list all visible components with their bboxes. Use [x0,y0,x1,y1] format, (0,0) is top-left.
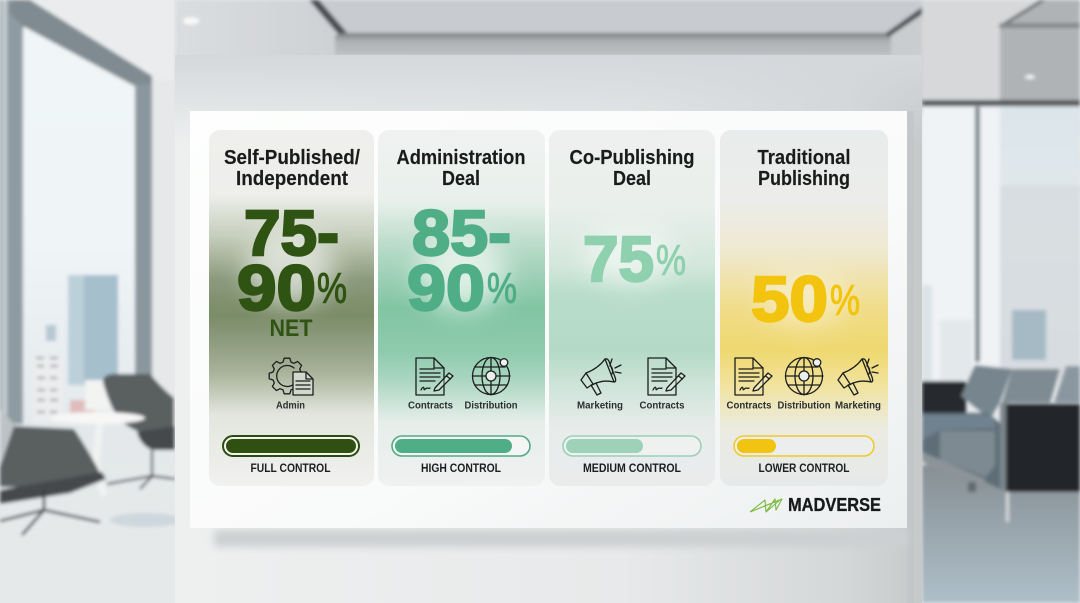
royalty figure: 75%: 75 [583,223,654,295]
royalty figure: 75-90% net: % [317,265,347,313]
panel: traditional publishing [720,130,888,486]
heading: traditional publishing [758,147,850,190]
control bar: medium [563,436,701,456]
left chair [0,410,20,474]
heading: traditional publishing: Traditional [758,147,850,169]
sofa seats [922,413,1002,490]
label: contracts: Contracts [408,400,453,412]
icon: globe [786,358,823,395]
heading: self-published: Self-Published/ [224,147,360,169]
heading: self-published: Independent [236,168,348,190]
icon: megaphone [838,359,878,395]
royalty figure: 75-90% net: 75- [244,197,339,269]
heading: self-published [224,147,360,190]
panel: administration deal [378,130,545,486]
royalty figure: 75% [583,223,686,295]
label: marketing: Marketing [835,400,881,412]
royalty figure: 75-90% net: NET [270,315,313,342]
sofa back [922,381,966,417]
royalty figure: 85-90% [407,197,517,324]
royalty figure: 50%: % [830,277,860,325]
control bar: high [392,436,530,456]
label: distribution: Distribution [464,400,518,412]
city buildings [68,275,118,385]
main infographic panel [190,111,907,528]
icon: contract [648,358,685,395]
royalty figure: 85-90%: 90 [407,252,485,324]
icon: globe [472,358,510,395]
main wall [175,55,922,603]
royalty figure: 75%: % [656,237,686,285]
right chair [103,374,174,432]
round table [96,420,104,496]
heading: administration deal [396,147,526,190]
label: contracts: Contracts [640,400,685,412]
left window [0,0,24,430]
heading: co-publishing deal [570,147,694,190]
label: high control: HIGH CONTROL [421,461,501,475]
sofa arm [1000,403,1007,490]
right floor [922,465,1080,603]
heading: administration deal: Deal [442,168,480,190]
control bar: full [223,436,359,456]
royalty figure: 50%: 50 [751,263,828,335]
label: contracts: Contracts [726,400,772,412]
label: medium control: MEDIUM CONTROL [583,461,681,475]
royalty figure: 85-90%: % [487,265,517,313]
royalty figure: 75-90% net [237,197,347,342]
label: lower control: LOWER CONTROL [758,461,850,475]
label: admin: Admin [276,400,305,412]
royalty figure: 85-90%: 85- [412,197,511,269]
heading: traditional publishing: Publishing [758,168,850,190]
heading: co-publishing deal: Co-Publishing [570,147,694,169]
panel: co-publishing deal [549,130,715,486]
logo: madverse [750,495,881,515]
heading: co-publishing deal: Deal [613,168,651,190]
royalty figure: 75-90% net: 90 [237,252,316,324]
icon: megaphone [581,359,621,395]
label: marketing: Marketing [577,400,623,412]
label: distribution: Distribution [778,400,830,412]
ceiling [0,0,1080,115]
control bar: lower [734,436,874,456]
label: full control: FULL CONTROL [250,461,330,475]
panel: self-published [209,130,374,486]
logo wordmark: MADVERSE [788,495,881,515]
royalty figure: 50% [751,263,860,335]
icon: contract [416,358,453,395]
icon: admin gear and document [269,358,313,395]
right window [922,107,1080,382]
top right glass [922,0,1080,102]
left floor [0,424,176,603]
sofa cushions [961,365,1012,419]
icon: contract [735,358,772,395]
heading: administration deal: Administration [396,147,526,169]
icon: logo zigzag [750,499,782,512]
